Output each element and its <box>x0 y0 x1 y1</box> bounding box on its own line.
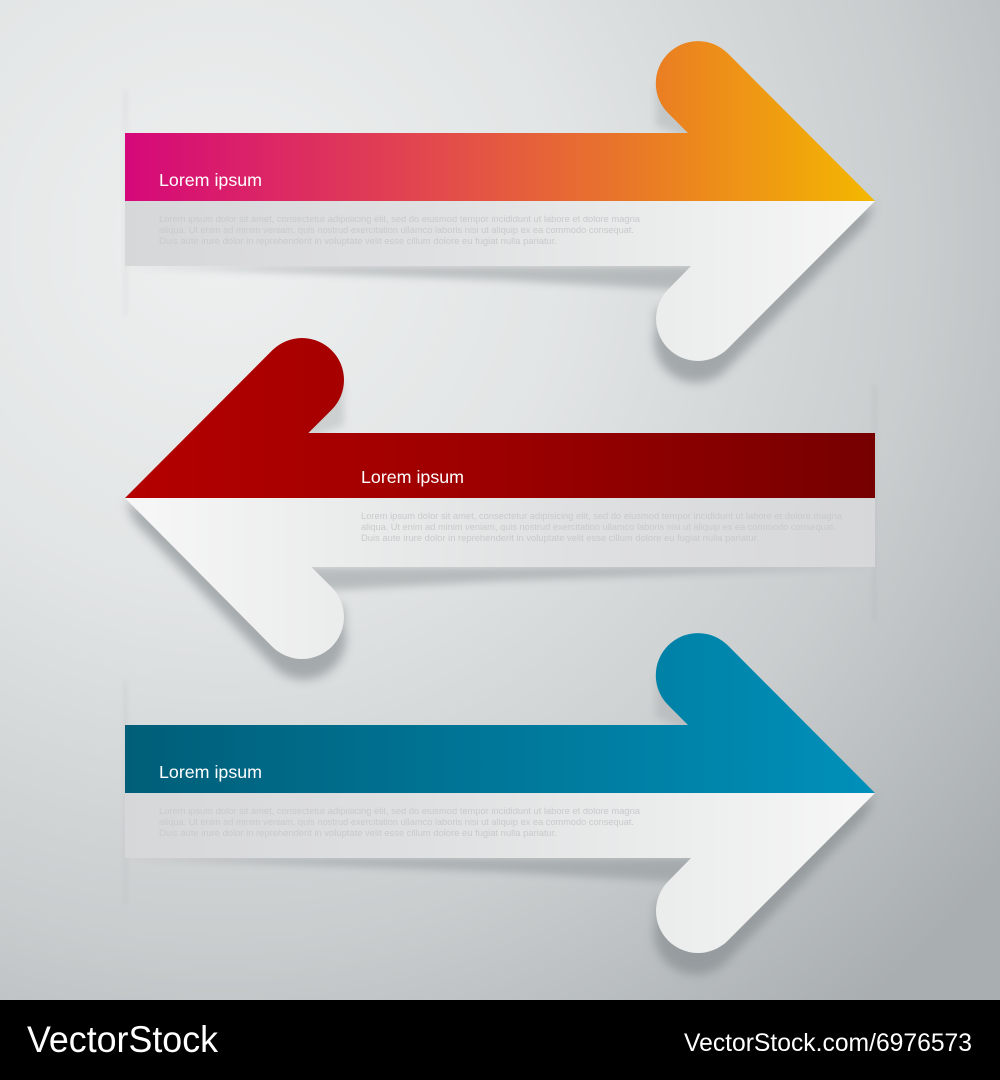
upper cap shadow <box>656 83 700 140</box>
body text: Duis aute irure dolor in reprehenderit in voluptate velit esse cillum dolore eu fugiat nulla pariatur. <box>361 533 759 543</box>
upper cap shadow <box>300 380 344 438</box>
edge shadow line at left of arrow 3 <box>124 680 127 905</box>
upper coloured half <box>125 633 875 793</box>
arrow 3: teal blue, pointing right <box>124 633 875 975</box>
upper cap shadow <box>656 675 700 732</box>
lower white half <box>125 201 875 361</box>
arrow 2: dark red, pointing left <box>125 338 876 680</box>
heading: Lorem ipsum <box>159 170 262 190</box>
body text: aliqua. Ut enim ad minim veniam, quis nostrud exercitation ullamco laboris nisi ut aliquip ex ea commodo consequat. <box>159 225 634 235</box>
edge shadow line at right of arrow 2 <box>873 385 876 620</box>
body text: aliqua. Ut enim ad minim veniam, quis nostrud exercitation ullamco laboris nisi ut aliquip ex ea commodo consequat. <box>361 522 836 532</box>
footer logo text: VectorStock <box>27 1019 218 1060</box>
body text: Lorem ipsum dolor sit amet, consectetur adipisicing elit, sed do eiusmod tempor incididunt ut labore et dolore magna <box>361 511 842 521</box>
head shadow <box>654 795 875 975</box>
footer image id: VectorStock.com/6976573 <box>684 1029 972 1057</box>
heading: Lorem ipsum <box>159 762 262 782</box>
stem shadow <box>300 567 875 592</box>
heading: Lorem ipsum <box>361 467 464 487</box>
edge shadow line at left of arrow 1 <box>124 90 127 315</box>
lower white half <box>125 498 875 659</box>
body text <box>361 511 842 543</box>
body text: Lorem ipsum dolor sit amet, consectetur adipisicing elit, sed do eiusmod tempor incididunt ut labore et dolore magna <box>159 806 640 816</box>
upper coloured half <box>125 338 875 498</box>
body text <box>159 806 640 838</box>
head shadow <box>654 203 875 383</box>
body text <box>159 214 640 246</box>
body text: Duis aute irure dolor in reprehenderit in voluptate velit esse cillum dolore eu fugiat nulla pariatur. <box>159 236 557 246</box>
body text: Duis aute irure dolor in reprehenderit in voluptate velit esse cillum dolore eu fugiat nulla pariatur. <box>159 828 557 838</box>
lower white half <box>125 793 875 953</box>
upper coloured half <box>125 41 875 201</box>
arrow 1: pink to orange, pointing right <box>124 41 875 383</box>
footer bar <box>0 1000 1000 1080</box>
head shadow <box>125 500 346 680</box>
stem shadow <box>125 266 700 291</box>
body text: aliqua. Ut enim ad minim veniam, quis nostrud exercitation ullamco laboris nisi ut aliquip ex ea commodo consequat. <box>159 817 634 827</box>
body text: Lorem ipsum dolor sit amet, consectetur adipisicing elit, sed do eiusmod tempor incididunt ut labore et dolore magna <box>159 214 640 224</box>
stem shadow <box>125 858 700 883</box>
